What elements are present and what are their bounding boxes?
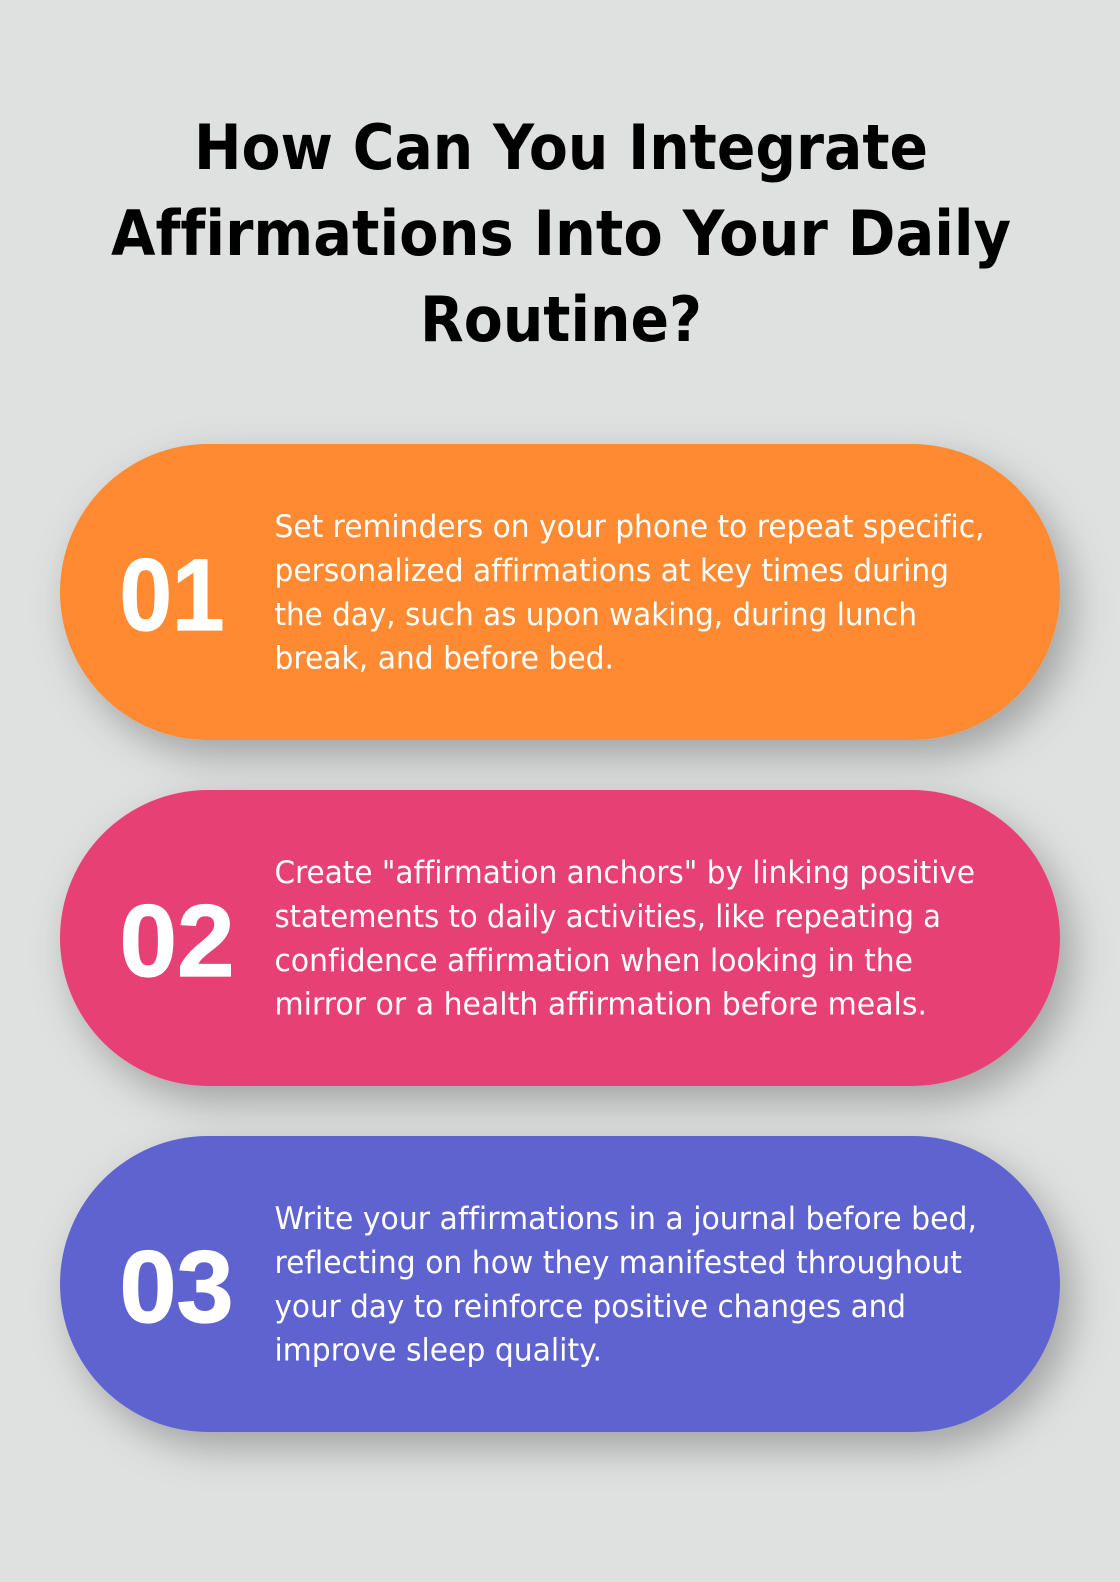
text block: step 01 description: the day, such as upon waking, during lunch xyxy=(274,597,917,633)
text block: step 03 description: Write your affirmations in a journal before bed, xyxy=(274,1201,977,1237)
text block: step 03 description xyxy=(274,1201,977,1368)
number 01: 01 xyxy=(120,538,224,652)
number 03: 03 xyxy=(120,1230,234,1344)
pill: orange background xyxy=(60,444,1060,740)
text block: step 01 description: personalized affirmations at key times during xyxy=(274,553,949,589)
text block: step 02 description xyxy=(274,855,975,1022)
title: Affirmations Into Your Daily xyxy=(111,197,1011,270)
text block: step 01 description: Set reminders on your phone to repeat specific, xyxy=(274,509,984,545)
text block: step 02 description: confidence affirmation when looking in the xyxy=(274,943,913,979)
title: Routine? xyxy=(420,283,702,356)
panel: step 02 xyxy=(60,790,1060,1086)
text block: step 03 description: improve sleep quality. xyxy=(274,1332,602,1368)
number 02: 02 xyxy=(120,884,234,998)
text block: step 02 description: mirror or a health affirmation before meals. xyxy=(274,986,927,1022)
pill: pink background xyxy=(60,790,1060,1086)
text block: step 02 description: Create "affirmation anchors" by linking positive xyxy=(274,855,975,891)
text block: step 03 description: reflecting on how they manifested throughout xyxy=(274,1245,962,1281)
text block: step 01 description xyxy=(274,509,984,676)
title xyxy=(111,111,1011,356)
text block: step 03 description: your day to reinforce positive changes and xyxy=(274,1289,906,1325)
text block: step 02 description: statements to daily activities, like repeating a xyxy=(274,899,941,935)
pill: blue background xyxy=(60,1136,1060,1432)
title: How Can You Integrate xyxy=(194,111,928,184)
panel: step 01 xyxy=(60,444,1060,740)
text block: step 01 description: break, and before bed. xyxy=(274,640,614,676)
panel: step 03 xyxy=(60,1136,1060,1432)
